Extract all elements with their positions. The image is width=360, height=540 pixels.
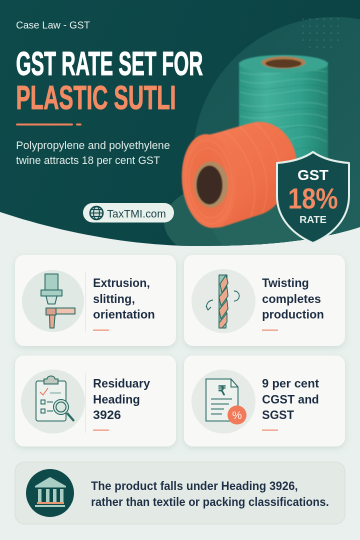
card: residuary heading: Residuary bbox=[93, 378, 151, 390]
card: twisting bbox=[184, 255, 345, 346]
badge: GST 18% rate bbox=[277, 152, 349, 243]
title bbox=[16, 46, 203, 117]
card: twisting: production bbox=[262, 310, 324, 322]
badge: GST 18% rate: GST bbox=[298, 167, 328, 184]
card: extrusion: orientation bbox=[93, 310, 155, 322]
card: residuary heading: Heading bbox=[93, 394, 140, 406]
card: twisting: completes bbox=[262, 294, 321, 306]
title: GST RATE SET FOR bbox=[16, 46, 203, 83]
card: CGST and SGST: CGST and bbox=[262, 394, 319, 406]
icon: percent badge: % bbox=[232, 410, 242, 422]
badge: GST 18% rate: RATE bbox=[300, 215, 327, 226]
icon: courthouse bbox=[26, 469, 74, 517]
card: twisting: Twisting bbox=[262, 278, 309, 290]
card: residuary heading: 3926 bbox=[93, 410, 121, 422]
card: CGST and SGST: SGST bbox=[262, 410, 294, 422]
brand pill: TaxTMI.com bbox=[107, 208, 166, 220]
brand pill bbox=[83, 203, 174, 222]
title rule bbox=[16, 124, 82, 126]
card: residuary heading bbox=[15, 356, 176, 446]
card: extrusion: Extrusion, bbox=[93, 278, 150, 290]
spool: green bbox=[239, 55, 328, 165]
icon: percent badge bbox=[228, 406, 246, 424]
panel: conclusion: The product falls under Heading 3926, bbox=[91, 480, 298, 493]
subtitle bbox=[16, 140, 170, 167]
header panel bbox=[0, 0, 360, 246]
icon: clipboard and magnifier bbox=[36, 376, 74, 421]
card: extrusion bbox=[15, 255, 176, 346]
card: CGST and SGST: 9 per cent bbox=[262, 378, 319, 390]
spool: orange bbox=[178, 122, 297, 230]
panel: conclusion: rather than textile or packing classifications. bbox=[91, 496, 329, 509]
subtitle: twine attracts 18 per cent GST bbox=[16, 155, 160, 167]
card: extrusion: slitting, bbox=[93, 294, 135, 306]
icon: rupee document: ₹ bbox=[218, 383, 227, 398]
icon: extruder bbox=[41, 274, 75, 328]
icon: twisted rope bbox=[206, 275, 239, 328]
panel: conclusion bbox=[15, 462, 345, 524]
subtitle: Polypropylene and polyethylene bbox=[16, 140, 170, 152]
badge: GST 18% rate: 18% bbox=[288, 184, 338, 216]
label: case law: Case Law - GST bbox=[16, 20, 90, 32]
title: PLASTIC SUTLI bbox=[16, 80, 176, 117]
card: CGST and SGST bbox=[184, 356, 345, 446]
icon: globe bbox=[90, 206, 103, 220]
icon: rupee document bbox=[206, 379, 238, 421]
